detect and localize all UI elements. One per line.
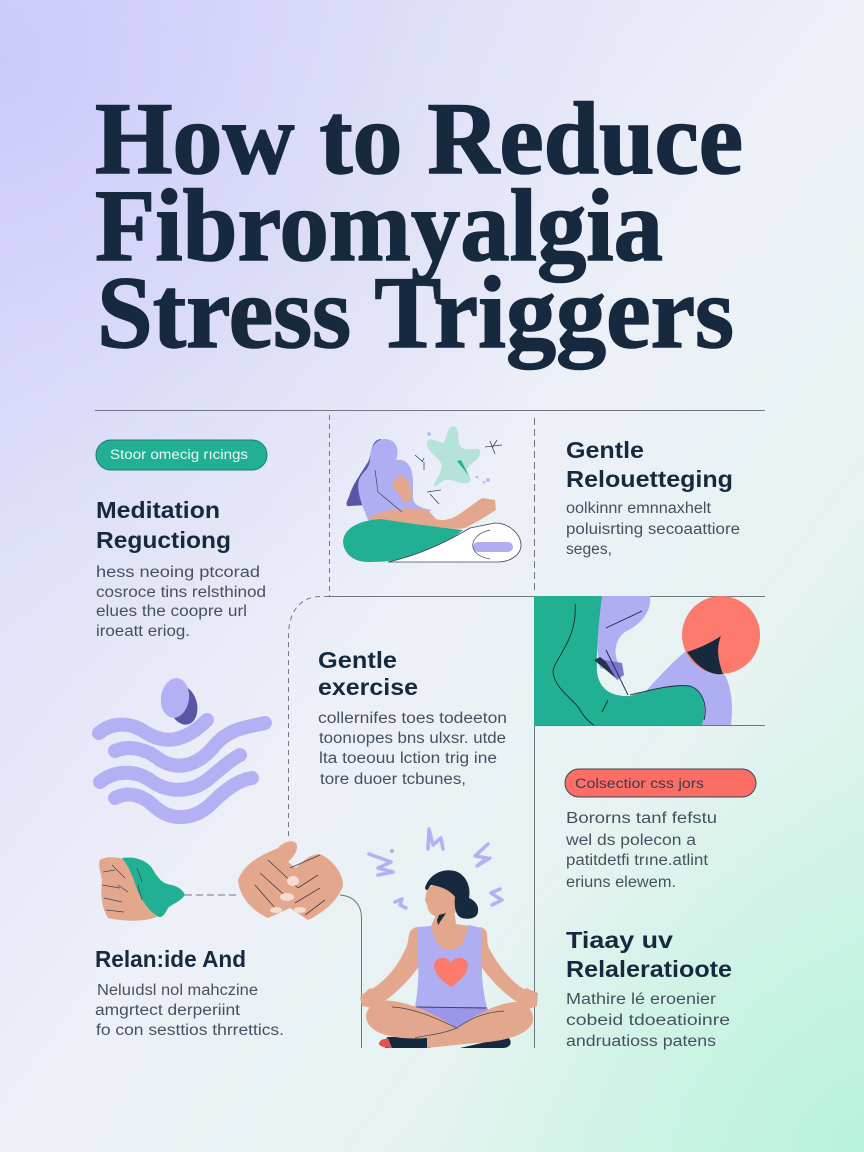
waves — [99, 720, 265, 817]
feet and socks — [385, 1037, 511, 1048]
body text: Neluıdsl nol mahczine — [97, 982, 258, 999]
icon: fist with green wrap — [99, 857, 185, 921]
heading: Gentle — [318, 647, 397, 673]
illustration: meditating woman — [360, 829, 538, 1048]
heading: meditation — [96, 497, 231, 553]
body text: Mathire lé eroenier — [566, 991, 716, 1008]
heading: exercise — [318, 674, 418, 700]
body text: fo con sesttios thrrettics. — [96, 1022, 284, 1039]
body text: patitdetfi trıne.atlint — [566, 852, 709, 869]
body text: meditation: cosroce tins relsthinod — [96, 584, 266, 601]
dark wedge — [687, 636, 723, 674]
body text: lta toeouu lction trig ine — [319, 750, 497, 767]
body text: oolkinnr emnnaxhelt — [566, 500, 712, 517]
title: Stress Triggers — [97, 256, 734, 370]
body text — [318, 710, 507, 788]
green wrap — [122, 857, 185, 917]
body text: amgrtect derperiint — [95, 1002, 241, 1019]
heading: Relouetteging — [566, 466, 733, 492]
figure arm and hand — [368, 475, 496, 530]
body text: Bororns tanf fefstu — [566, 810, 717, 827]
body text: wel ds polecon a — [565, 832, 696, 849]
body text: toonıopes bns ulxsr. utde — [319, 730, 506, 747]
body text: poluisrting secoaattiore — [566, 521, 740, 538]
pill label: coral: Colsectior css jors — [575, 776, 704, 791]
icon: water drop and waves — [99, 676, 265, 817]
body text — [565, 810, 717, 891]
panel: coral pill and text — [565, 769, 756, 891]
icon: green leaf — [457, 460, 469, 476]
title: Fibromyalgia — [95, 169, 663, 283]
title — [95, 82, 743, 370]
body text: meditation: iroeatt eriog. — [96, 623, 190, 640]
hair — [425, 870, 478, 925]
body text: meditation: elues the coopre url — [96, 603, 247, 620]
body text: cobeid tdoeatioinre — [566, 1012, 730, 1029]
illustration: seated figure with splash — [343, 426, 521, 562]
panel: relanide and — [95, 946, 284, 1039]
body text: tore duoer tcbunes, — [320, 771, 466, 788]
illustration: stretching leg with coral circle — [534, 596, 760, 725]
arms — [362, 927, 537, 1006]
body text — [566, 991, 730, 1050]
crossed legs — [366, 1001, 533, 1048]
lavender limb — [647, 648, 732, 725]
stress marks — [369, 829, 502, 908]
figure hair — [346, 439, 385, 506]
white cushion — [388, 523, 521, 562]
green leg — [534, 596, 704, 725]
shorts — [415, 1007, 491, 1028]
neck and chest — [431, 915, 470, 955]
panel: meditation text — [96, 440, 267, 640]
pill label: teal — [96, 440, 267, 470]
sparkles — [415, 440, 502, 504]
heading: meditation: Meditation — [96, 497, 220, 523]
green cushion — [343, 519, 463, 562]
sparkle dots — [427, 432, 490, 483]
coral circle — [682, 596, 760, 674]
figure body — [358, 439, 432, 525]
body text: collernifes toes todeeton — [318, 710, 507, 727]
heart — [434, 958, 468, 987]
tank top — [415, 925, 487, 1007]
body text — [95, 982, 284, 1039]
panel: tiaay uv — [566, 927, 732, 1050]
heading: Tiaay uv — [566, 927, 673, 953]
body text: meditation: hess neoing ptcorad — [96, 564, 260, 581]
title: How to Reduce — [95, 82, 743, 196]
icon: clasped hands — [238, 841, 343, 920]
heading: Relan:ide And — [95, 946, 246, 972]
face — [425, 885, 458, 919]
lavender arm — [596, 596, 650, 672]
heading — [566, 437, 733, 492]
heading: Gentle — [566, 437, 644, 463]
panel: gentle exercise — [318, 647, 507, 788]
heading: Relaleratioote — [566, 956, 732, 982]
heading: meditation: Reguctiong — [96, 527, 231, 553]
body text: andruatioss patens — [566, 1033, 716, 1050]
body text — [566, 500, 740, 558]
fist — [99, 857, 160, 921]
body text: seges, — [566, 541, 612, 558]
leg contour lines — [553, 604, 705, 725]
panel: gentle relouetteging — [566, 437, 740, 558]
body text: eriuns elewem. — [566, 874, 676, 891]
hands — [360, 988, 538, 1009]
icon: mint splash — [427, 426, 480, 487]
pill label: coral — [565, 769, 756, 797]
heading — [566, 927, 732, 982]
pill label: teal: Stoor omecig rıcings — [110, 447, 248, 462]
band — [594, 657, 620, 680]
lavender pill — [473, 542, 513, 552]
water drop — [158, 676, 202, 728]
heading — [318, 647, 418, 700]
body text: meditation — [96, 564, 266, 640]
